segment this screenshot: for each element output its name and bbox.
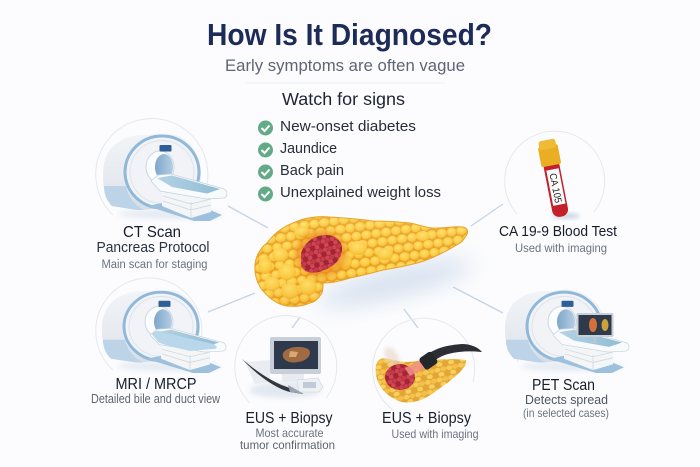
heading: watch for signs: Watch for signs xyxy=(282,89,405,109)
sign: back pain: Back pain xyxy=(280,162,344,179)
sign: jaundice xyxy=(258,140,337,158)
label: EUS + Biopsy: EUS + Biopsy xyxy=(246,410,332,427)
connector: PET scan xyxy=(453,287,503,313)
icon: endoscopic biopsy xyxy=(373,318,482,410)
connector: MRI xyxy=(208,293,255,312)
label: CT scan: CT Scan xyxy=(123,224,181,241)
label: most accurate: Most accurate xyxy=(256,426,324,440)
label: pancreas protocol: Pancreas Protocol xyxy=(96,240,210,256)
icon: tumor xyxy=(301,235,342,273)
label: used with imaging: Used with imaging xyxy=(392,427,478,441)
label: in selected cases: (in selected cases) xyxy=(523,406,609,420)
icon: endoscope probe xyxy=(242,359,303,394)
icon: PET scanner xyxy=(505,290,629,373)
panel: PET scan xyxy=(505,290,629,420)
sign: unexplained weight loss: Unexplained weight loss xyxy=(280,184,441,201)
connector: CA 19-9 xyxy=(471,204,503,226)
label: CA 19-9 blood test: CA 19-9 Blood Test xyxy=(499,223,618,240)
icon: scope xyxy=(424,344,482,362)
panel: EUS + Biopsy left xyxy=(235,316,337,452)
icon: pancreas organ xyxy=(250,210,476,314)
panel: watch for signs xyxy=(258,89,441,202)
panel: MRI / MRCP xyxy=(91,278,226,406)
panel: CT scan xyxy=(96,119,227,271)
icon: ultrasound console xyxy=(235,316,337,403)
subtitle: Early symptoms are often vague xyxy=(225,56,465,75)
connector: CT scan xyxy=(228,206,268,228)
panel: EUS + Biopsy right xyxy=(373,318,482,441)
sign: new-onset diabetes: New-onset diabetes xyxy=(280,118,416,135)
icon: CT scanner xyxy=(96,119,227,221)
panel: CA 19-9 blood test xyxy=(499,131,618,255)
icon: tumor sample xyxy=(385,364,415,390)
sign: jaundice: Jaundice xyxy=(280,140,337,157)
label: used with imaging: Used with imaging xyxy=(515,241,607,255)
label: detects spread: Detects spread xyxy=(525,392,608,407)
icon: monitor xyxy=(576,313,614,343)
icon: blood tube: CA 105 xyxy=(547,173,563,204)
title: How Is It Diagnosed? xyxy=(207,17,492,52)
label: main scan for staging: Main scan for staging xyxy=(102,259,208,271)
label: detailed bile and duct view: Detailed bile and duct view xyxy=(91,392,221,406)
icon: patient xyxy=(152,331,217,351)
connector: EUS left xyxy=(292,317,300,328)
connector: EUS right xyxy=(404,309,418,328)
label: PET scan: PET Scan xyxy=(532,377,595,394)
label: EUS + Biopsy: EUS + Biopsy xyxy=(382,410,471,427)
label: tumor confirmation: tumor confirmation xyxy=(240,438,335,452)
icon: MRI scanner xyxy=(96,278,226,373)
label: MRI / MRCP: MRI / MRCP xyxy=(116,376,196,393)
